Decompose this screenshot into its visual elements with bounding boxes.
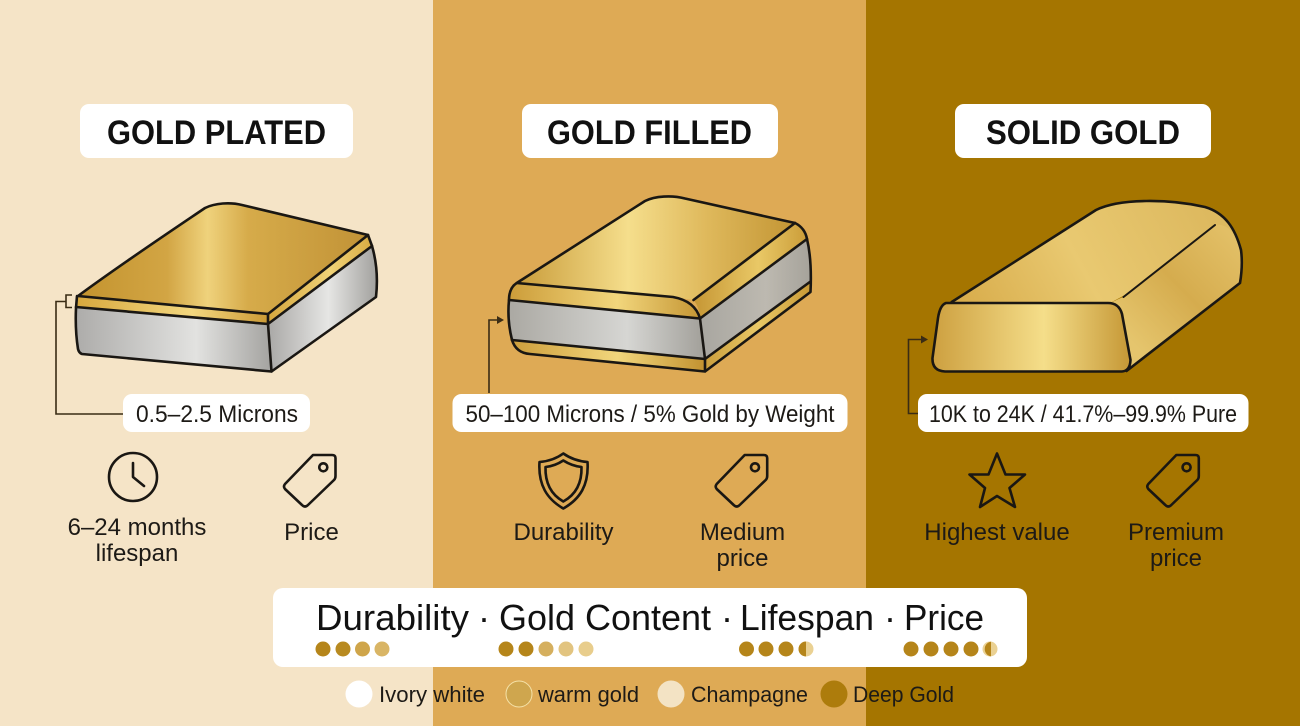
heading: gold filled: GOLD FILLED — [547, 114, 752, 152]
rating dots: durability — [316, 642, 390, 656]
label: lifespan: lifespan — [96, 540, 178, 567]
label: medium price: Medium — [700, 519, 785, 546]
callout label: microns: 0.5–2.5 Microns — [136, 401, 298, 428]
panel background: deep gold — [866, 0, 1300, 726]
swatch: champagne — [658, 680, 684, 708]
illustration: solid gold bar — [932, 201, 1242, 372]
label: highest value: Highest value — [924, 519, 1070, 546]
callout label: microns — [123, 394, 310, 432]
icon: price tag — [1147, 455, 1199, 506]
icon: price tag — [284, 455, 336, 506]
panel: gold filled — [433, 0, 867, 726]
panel: gold plated — [0, 0, 434, 726]
panel: solid gold — [866, 0, 1300, 726]
heading: criteria: Lifespan — [740, 597, 874, 638]
panel background: warm gold — [433, 0, 867, 726]
heading: criteria: · — [721, 597, 733, 638]
label: premium price: Premium — [1128, 519, 1224, 546]
panel: comparison criteria — [273, 588, 1027, 667]
icon: star — [970, 454, 1025, 507]
swatch: deep gold — [820, 680, 848, 708]
legend label: champagne: Champagne — [691, 682, 808, 707]
heading: criteria: · — [478, 597, 490, 638]
label: premium price: price — [1150, 545, 1202, 572]
rating dots: gold content — [498, 642, 594, 656]
heading: criteria: · — [884, 597, 896, 638]
heading: gold plated — [80, 104, 353, 158]
illustration: gold filled bar cross-section — [508, 196, 811, 372]
callout arrow: solid gold — [908, 336, 928, 414]
icon: price tag — [716, 455, 767, 506]
panel background: ivory — [0, 0, 434, 726]
swatch: ivory white — [346, 680, 372, 708]
label: medium price: price — [716, 545, 769, 572]
callout arrow: gold filled — [489, 316, 504, 393]
icon: clock — [109, 453, 157, 501]
legend label: ivory white: Ivory white — [379, 682, 485, 707]
heading: solid gold — [955, 104, 1211, 158]
rating dots: price — [904, 642, 998, 656]
icon: shield — [539, 454, 588, 508]
callout label: microns and gold weight — [452, 394, 848, 432]
panel background: white — [273, 588, 1027, 667]
heading: criteria: Price — [904, 597, 984, 638]
callout label: karat and purity — [918, 394, 1248, 432]
legend label: warm gold: warm gold — [537, 682, 639, 707]
illustration: gold plated bar cross-section — [76, 203, 377, 372]
legend label: deep gold: Deep Gold — [853, 682, 954, 707]
heading: solid gold: SOLID GOLD — [986, 114, 1180, 152]
heading: gold filled — [522, 104, 778, 158]
heading: gold plated: GOLD PLATED — [107, 114, 326, 152]
heading: criteria: Durability — [316, 597, 469, 638]
label: lifespan: 6–24 months — [68, 514, 206, 541]
legend: colour palette — [346, 680, 954, 708]
label: price: Price — [284, 519, 339, 546]
heading: criteria: Gold Content — [499, 597, 711, 638]
callout label: karat and purity: 10K to 24K / 41.7%–99.9% Pure — [929, 401, 1237, 428]
callout line: plating thickness bracket — [56, 295, 123, 414]
callout label: microns and gold weight: 50–100 Microns / 5% Gold by Weight — [466, 401, 835, 428]
swatch: warm gold — [506, 681, 532, 707]
rating dots: lifespan — [739, 642, 814, 657]
label: durability: Durability — [513, 519, 614, 546]
